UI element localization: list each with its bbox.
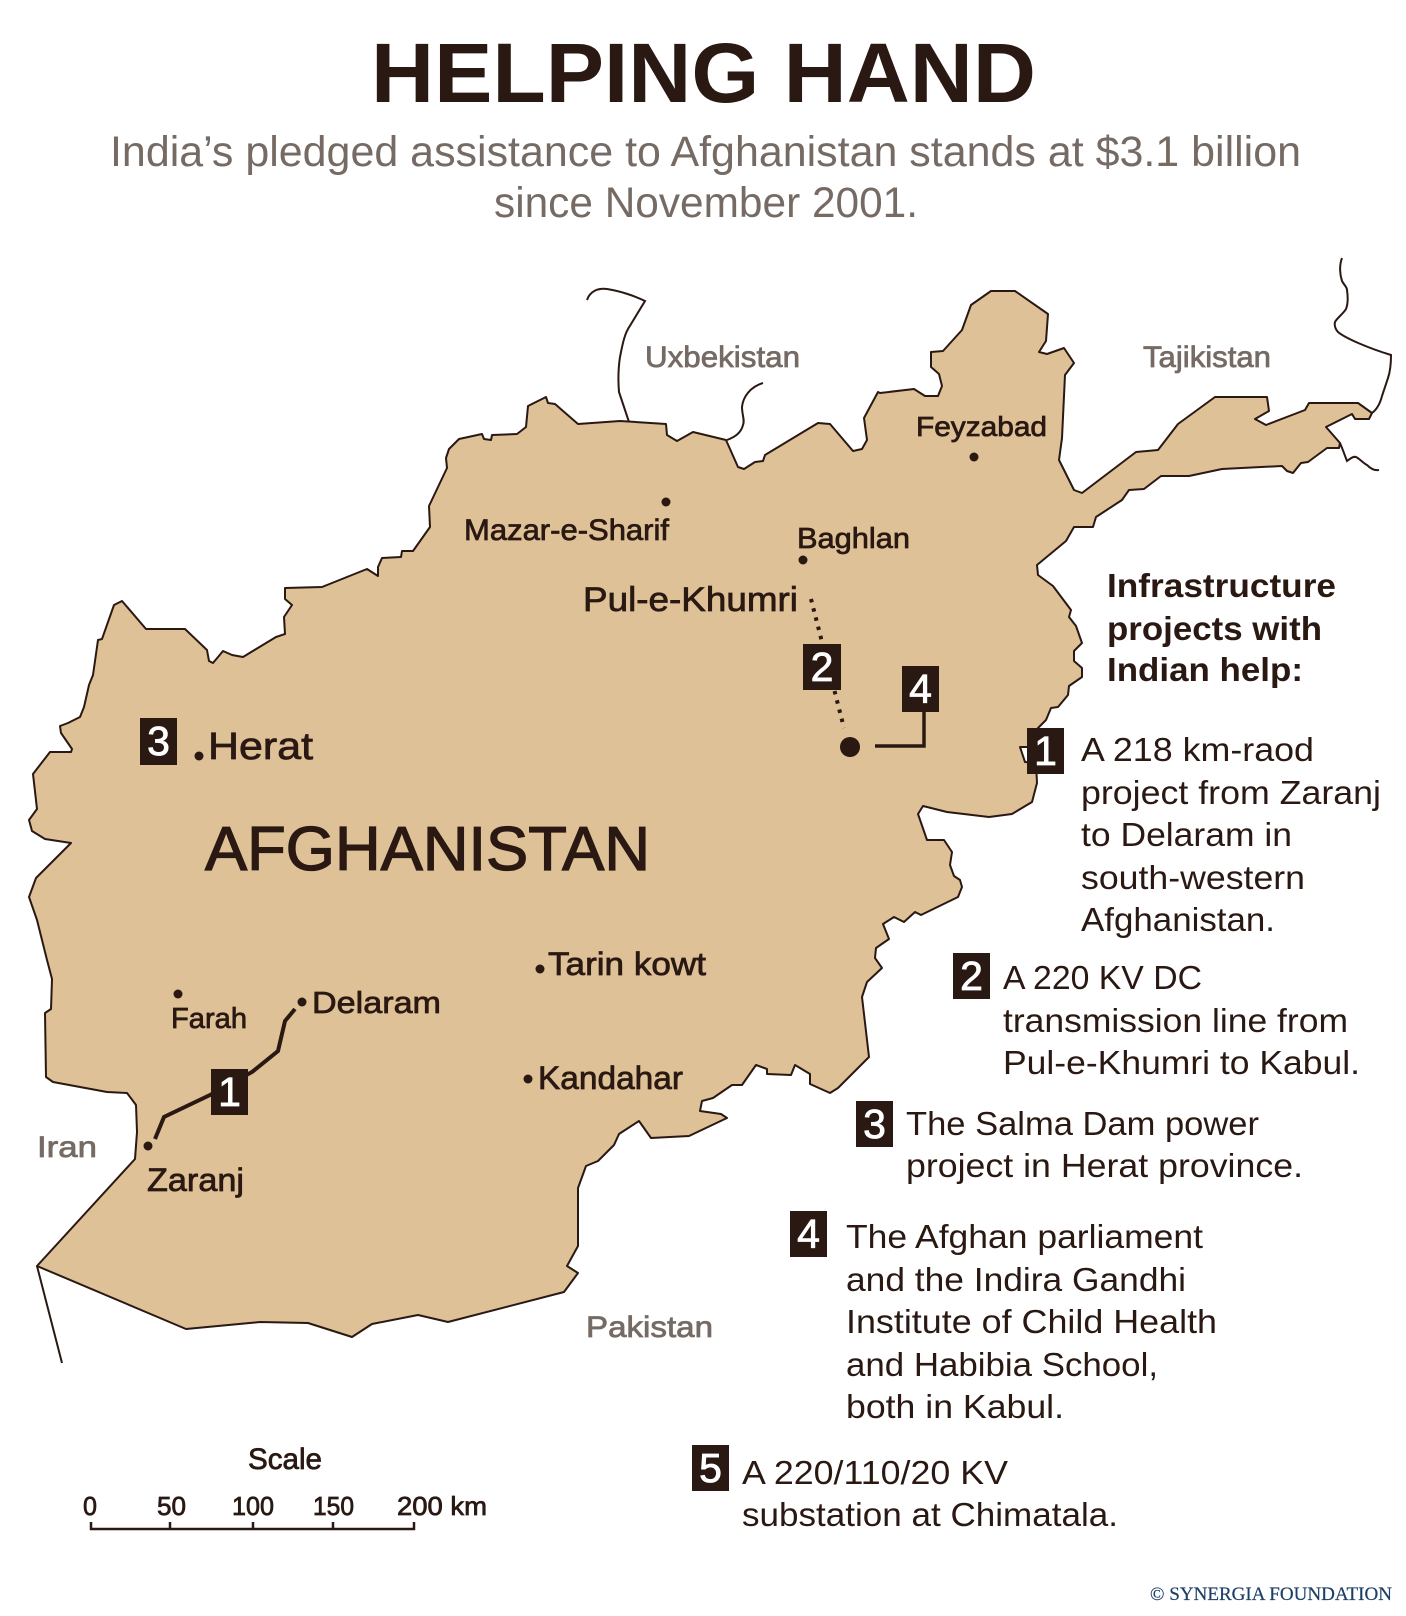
country labels [37,341,1271,1344]
project 3: Herat marker: 3 [147,718,170,764]
country name: AFGHANISTAN [205,815,650,884]
list item 4: The Afghan parliament [846,1218,1203,1255]
scale bar: 100 [232,1491,274,1521]
scale bar: 150 [313,1491,354,1521]
list item 5 [692,1445,1118,1533]
project 1: Zaranj-Delaram road: 1 [218,1069,241,1115]
country labels: Pakistan [586,1311,713,1344]
list item 4 [790,1211,1217,1425]
project 2: transmission line [803,599,844,728]
cities: Feyzabad [916,411,1047,442]
list item 2: A 220 KV DC [1003,959,1202,996]
project 4: Kabul marker [840,666,939,757]
title: HELPING HAND [371,26,1036,120]
map of Afghanistan [29,258,1391,1363]
credit: © SYNERGIA FOUNDATION [1150,1584,1392,1605]
cities: Delaram [312,985,441,1020]
cities: Pul-e-Khumri [583,581,798,619]
list item 1 [1027,728,1381,938]
list item 1: project from Zaranj [1081,774,1381,811]
neighbouring borders [37,258,1391,1363]
subtitle: since November 2001. [494,179,918,227]
list item 4: 4 [797,1211,820,1257]
subtitle: India’s pledged assistance to Afghanistan stands at $3.1 billion [110,128,1301,176]
list item 3 [856,1101,1303,1184]
list item 2: transmission line from [1003,1002,1348,1039]
list item 2: Pul-e-Khumri to Kabul. [1003,1044,1360,1081]
project 3: Herat marker [140,718,177,765]
infrastructure projects heading: Infrastructure [1107,567,1336,604]
list item 5: A 220/110/20 KV [742,1454,1008,1491]
cities: Farah [171,1003,247,1035]
country labels: Tajikistan [1143,341,1271,374]
list item 3: 3 [863,1101,886,1147]
project 1: Zaranj-Delaram road [155,1009,295,1139]
infrastructure projects heading: Indian help: [1107,651,1303,688]
list item 1: A 218 km-raod [1081,731,1314,768]
list item 3: The Salma Dam power [906,1105,1259,1142]
cities: Kandahar [538,1060,683,1096]
list item 1: to Delaram in [1081,816,1292,853]
cities [144,411,1047,1198]
list item 5: substation at Chimatala. [742,1496,1118,1533]
scale bar: Scale [248,1443,322,1476]
cities: Baghlan [797,523,910,555]
country labels: Iran [37,1131,97,1164]
scale bar: 50 [157,1491,186,1521]
list item 2 [953,953,1360,1081]
infrastructure projects heading: projects with [1107,610,1322,647]
project 2: transmission line: 2 [811,644,833,690]
list item 4: and the Indira Gandhi [846,1261,1186,1298]
list item 1: Afghanistan. [1081,901,1275,938]
list item 4: both in Kabul. [846,1388,1064,1425]
list item 2: 2 [960,953,983,999]
cities: Mazar-e-Sharif [464,514,670,547]
list item 1: south-western [1081,859,1305,896]
list item 1: 1 [1034,728,1057,774]
project 4: Kabul marker: 4 [909,666,932,712]
country labels: Uxbekistan [645,341,800,374]
list item 4: Institute of Child Health [846,1303,1217,1340]
subtitle [110,128,1301,227]
cities: Herat [208,726,313,768]
scale bar: 0 [83,1491,97,1521]
cities: Zaranj [147,1162,244,1198]
list item 4: and Habibia School, [846,1346,1158,1383]
scale bar [83,1443,487,1529]
list item 3: project in Herat province. [906,1147,1303,1184]
list item 5: 5 [699,1445,722,1491]
cities: Tarin kowt [548,946,706,982]
country shape [29,291,1372,1337]
scale bar: 200 km [397,1491,487,1521]
infrastructure projects heading [1107,567,1336,688]
